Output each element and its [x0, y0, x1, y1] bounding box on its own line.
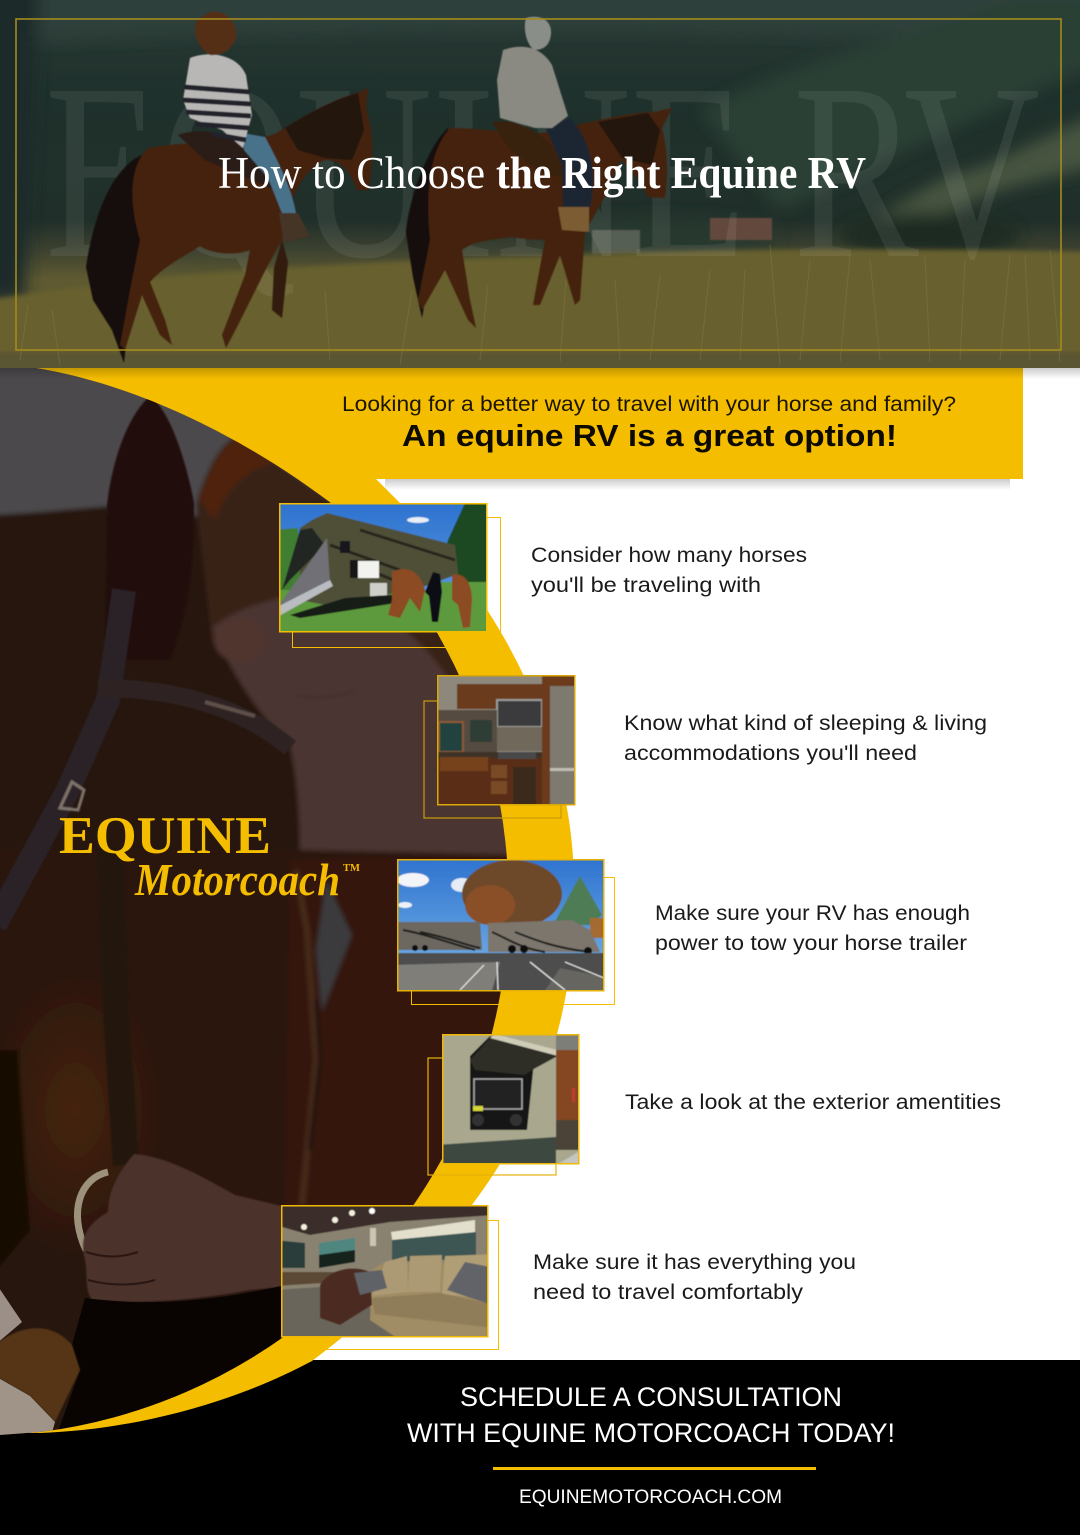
text: item 5: Make sure it has everything you	[533, 1251, 856, 1274]
intro text: An equine RV is a great option!	[402, 418, 897, 453]
footer call to action	[407, 1382, 895, 1448]
horse ear	[105, 396, 194, 660]
woman face	[212, 590, 530, 860]
woman hair	[195, 438, 459, 675]
footer divider	[493, 1467, 816, 1470]
intro text: Looking for a better way to travel with your horse and family?	[342, 392, 956, 416]
text: item 4: Take a look at the exterior amentities	[625, 1091, 1001, 1114]
dark lower garment	[58, 1286, 282, 1430]
photo 1: horse trailer with horses	[270, 495, 495, 640]
forest and hill background	[0, 0, 1080, 300]
logo: Equine Motorcoach: EQUINE	[59, 807, 271, 865]
intro text	[342, 392, 956, 453]
photo 4: exterior entertainment center	[435, 1030, 585, 1170]
gold frame	[16, 19, 1061, 350]
bridle straps	[0, 590, 290, 1165]
yellow curved swoosh	[0, 368, 1023, 1433]
text: item 3	[655, 902, 970, 955]
text: item 2: Know what kind of sleeping & living	[624, 712, 987, 735]
right horse and rider	[406, 17, 672, 328]
text: item 1: Consider how many horses	[531, 544, 807, 567]
rider two	[545, 118, 593, 208]
footer call to action: WITH EQUINE MOTORCOACH TODAY!	[407, 1418, 895, 1448]
text: item 1	[531, 544, 807, 597]
title: How to Choose	[218, 148, 485, 198]
text: item 1: you'll be traveling with	[531, 574, 761, 597]
text: item 2	[624, 712, 987, 765]
ring held in hand	[77, 1172, 108, 1250]
text: item 3: Make sure your RV has enough	[655, 902, 970, 925]
footer call to action: SCHEDULE A CONSULTATION	[460, 1382, 842, 1412]
footer band	[0, 1360, 1080, 1535]
title	[218, 148, 866, 198]
rider one	[243, 133, 296, 213]
left horse and rider	[86, 12, 372, 363]
top shadow over yellow banner	[0, 368, 1080, 379]
text: item 5	[533, 1251, 856, 1304]
distant buildings	[592, 230, 640, 254]
banner shadow on white	[385, 479, 1010, 490]
logo: Equine Motorcoach: Motorcoach	[134, 854, 340, 905]
logo: Equine Motorcoach: TM	[343, 862, 361, 874]
logo: Equine Motorcoach	[59, 807, 361, 905]
shirt and lower body	[0, 850, 530, 1230]
frame: photo 2 offset outline	[424, 701, 561, 818]
text: item 3: power to tow your horse trailer	[655, 932, 967, 955]
frame: photo 1 offset outline	[292, 518, 500, 648]
photo 2: kitchen interior	[430, 670, 580, 810]
hand	[83, 1154, 290, 1302]
frame: photo 3 offset outline	[412, 878, 614, 1004]
header photo panel	[0, 0, 1080, 380]
text: item 5: need to travel comfortably	[533, 1281, 804, 1304]
frame: photo 5 offset outline	[296, 1220, 498, 1350]
grass field	[0, 246, 1080, 350]
text: item 2: accommodations you'll need	[624, 742, 917, 765]
frame: photo 4 offset outline	[428, 1058, 556, 1175]
shirt collar	[316, 880, 352, 1012]
photo 3: motorcoach in parking lot	[390, 850, 610, 998]
title: the Right Equine RV	[496, 148, 866, 198]
panel: left photo of woman and horse	[0, 368, 507, 1435]
photo 5: coach living room with sofa	[275, 1200, 495, 1340]
footer website: EQUINEMOTORCOACH.COM	[519, 1487, 782, 1508]
